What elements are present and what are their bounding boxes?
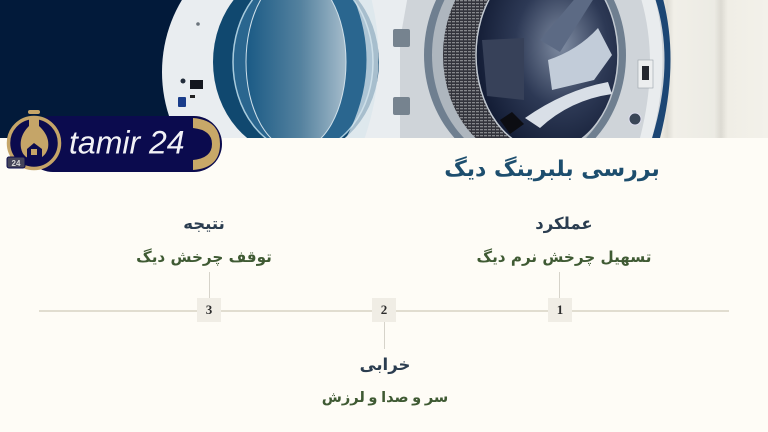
logo badge: 24 (12, 159, 21, 168)
timeline line (39, 310, 729, 312)
step 3 description: توقف چرخش دیگ (136, 248, 272, 266)
step 3 marker (197, 298, 221, 322)
step 1 description: تسهیل چرخش نرم دیگ (477, 248, 651, 266)
step 2 description: سر و صدا و لرزش (322, 389, 448, 406)
step 2 marker (372, 298, 396, 322)
hero photo: open washing machine (0, 0, 768, 138)
step 2 connector (384, 322, 385, 349)
logo badge (6, 110, 222, 172)
machine body and drum (393, 0, 671, 171)
step 1 heading: عملکرد (535, 214, 593, 233)
step 3 heading: نتیجه (183, 214, 225, 233)
title: بررسی بلبرینگ دیگ (444, 157, 660, 182)
left door (162, 0, 420, 204)
step 1 connector (559, 272, 560, 298)
step 2 marker: 2 (381, 302, 387, 317)
logo: tamir 24 (6, 110, 222, 172)
logo badge: tamir 24 (69, 124, 185, 160)
step 3 connector (209, 272, 210, 298)
step 3 marker: 3 (206, 302, 212, 317)
step 1 marker: 1 (557, 302, 563, 317)
step 1 marker (548, 298, 572, 322)
step 2 heading: خرابی (360, 355, 410, 374)
